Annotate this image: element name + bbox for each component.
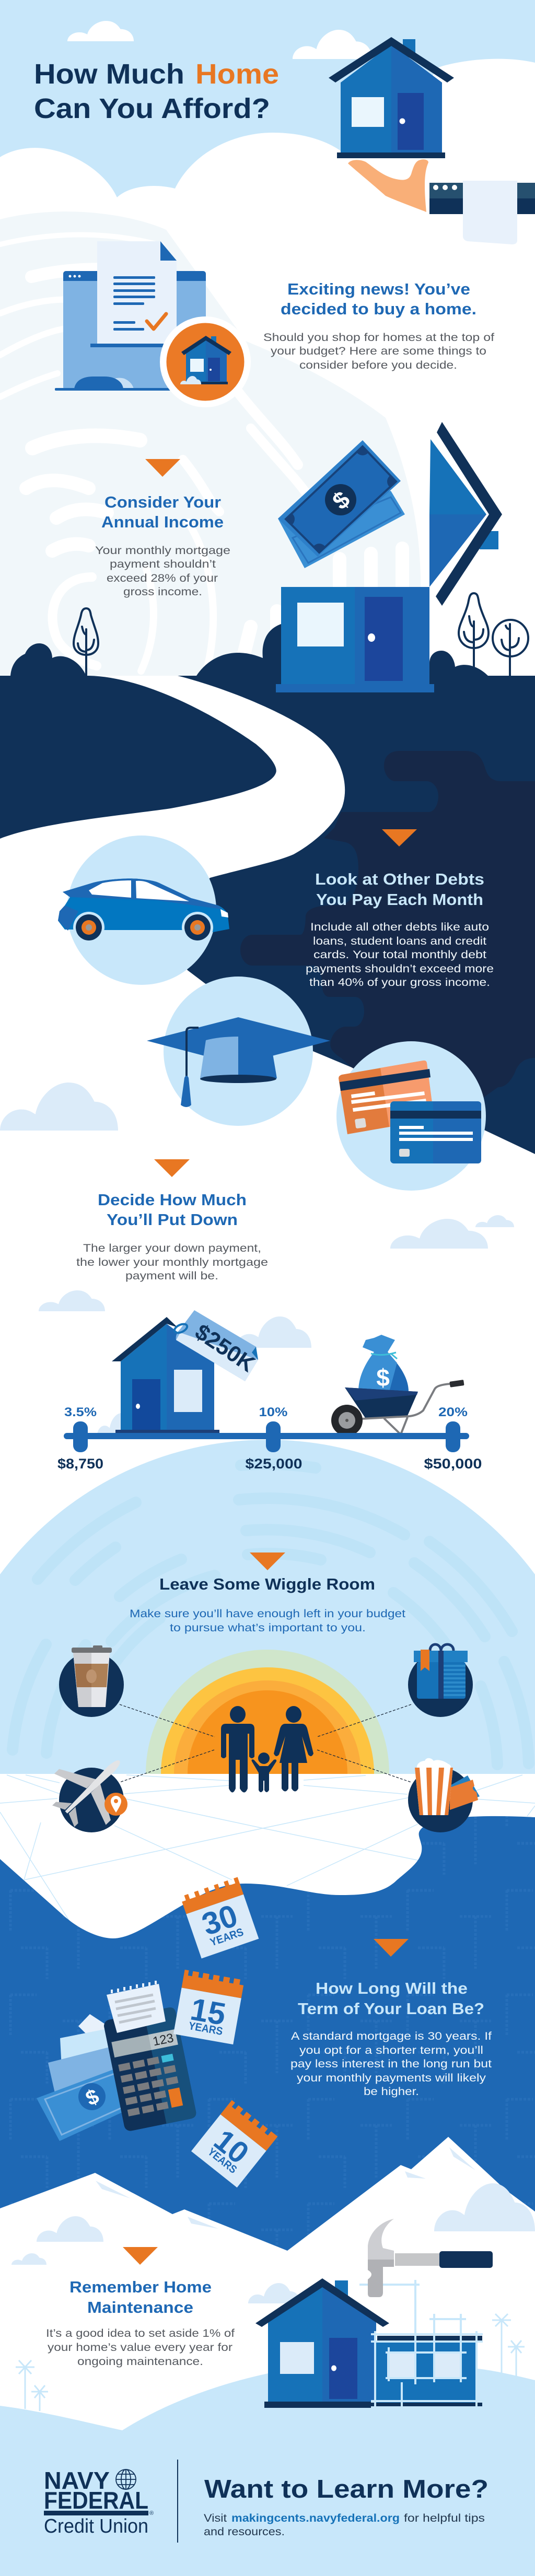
heading: down payment: You’ll Put Down	[107, 1210, 238, 1229]
icon: calendar 15 years: 15	[188, 1992, 228, 2032]
woman	[274, 1706, 313, 1791]
location pin	[104, 1793, 127, 1816]
chimney	[403, 39, 415, 57]
connector lines	[120, 1704, 411, 1782]
icon: globe	[116, 2469, 136, 2489]
cloud: right	[390, 1219, 488, 1249]
text: footer body	[204, 2512, 485, 2538]
cloud: left mountain	[37, 2216, 103, 2242]
text: intro body	[263, 332, 494, 371]
hand	[348, 159, 428, 212]
marker: 20%: 20%	[438, 1405, 468, 1419]
title: Can You Afford?	[34, 93, 270, 124]
front bill	[278, 440, 402, 558]
cloud: behind house	[248, 2283, 300, 2303]
document	[97, 241, 177, 344]
icon: hammer	[368, 2219, 493, 2297]
extension	[371, 2336, 482, 2406]
blue card	[390, 1101, 481, 1163]
icon: calendar 10 years: YEARS	[205, 2146, 239, 2176]
cloud: above house	[39, 1290, 105, 1311]
text: wiggle room body: to pursue what’s important to you.	[170, 1622, 366, 1634]
text: footer body: and resources.	[204, 2526, 285, 2538]
car windows	[89, 880, 228, 918]
heading: other debts: Look at Other Debts	[315, 870, 484, 888]
text: maintenance body: your home’s value every year for	[48, 2342, 232, 2354]
text: intro body: consider before you decide.	[299, 359, 457, 371]
background: navy region right	[157, 676, 535, 1154]
icon: note and calculator and money	[37, 1981, 197, 2141]
tickets	[449, 1775, 480, 1810]
marker: 10%: $25,000	[246, 1456, 302, 1472]
icon: house with price tag	[112, 1310, 259, 1435]
icon: right trees	[459, 593, 528, 676]
text: loan term body: A standard mortgage is 30 years. If	[291, 2030, 492, 2042]
text: other debts body: payments shouldn’t exceed more	[306, 963, 494, 975]
background: bottom hill	[0, 2369, 535, 2576]
icon: wheelbarrow with money bag	[331, 1335, 464, 1436]
heading: loan term: How Long Will the	[316, 1979, 468, 1997]
icon: hand holding house	[329, 37, 535, 244]
icon: plane	[38, 1735, 145, 1842]
background: ground grid lines	[0, 1775, 535, 1927]
heading: want to learn more: Want to Learn More?	[204, 2475, 489, 2503]
text: annual income body: gross income.	[123, 586, 202, 598]
price tag: $250K	[190, 1320, 259, 1377]
icon: coffee	[59, 1645, 124, 1717]
base	[337, 152, 445, 158]
heading: loan term	[298, 1979, 484, 2018]
background: navy hill left	[0, 676, 276, 839]
cloud: left	[0, 1083, 118, 1131]
icon: calendar 30 years: 30	[197, 1898, 242, 1942]
background: white ground	[0, 1774, 535, 1962]
text: loan term body: pay less interest in the long run but	[290, 2058, 492, 2070]
text: loan term body: you opt for a shorter term, you’ll	[299, 2044, 483, 2056]
cloud: right mountain	[434, 2183, 535, 2231]
scaffold	[359, 2280, 483, 2413]
marker: 10%	[246, 1405, 302, 1472]
heading: other debts: You Pay Each Month	[316, 890, 483, 909]
icon: calendar 10 years	[191, 2100, 277, 2187]
window	[352, 97, 384, 127]
background: fingerprint pattern	[0, 211, 421, 676]
icon: graduation cap	[147, 977, 330, 1126]
money bag: $	[376, 1364, 390, 1391]
cloud: behind house low	[97, 1413, 139, 1436]
logo: Navy Federal Credit Union: FEDERAL	[44, 2487, 148, 2514]
title: Home	[195, 58, 279, 90]
house	[112, 1317, 219, 1435]
text: wiggle room body	[130, 1608, 405, 1634]
background: dark blobs	[240, 751, 535, 1107]
house walls	[341, 44, 442, 152]
marker: 3.5%: 3.5%	[64, 1405, 97, 1419]
arrow: wiggle room	[250, 1552, 285, 1570]
man	[221, 1706, 254, 1792]
icon: family	[221, 1706, 313, 1792]
mouse	[74, 377, 134, 390]
logo: Navy Federal Credit Union: ®	[149, 2510, 154, 2516]
roof	[255, 2278, 389, 2327]
icon: credit cards	[336, 1041, 486, 1191]
icon: money bills	[278, 440, 405, 568]
text: maintenance body: It’s a good idea to set aside 1% of	[46, 2327, 235, 2339]
text: other debts body: than 40% of your gross income.	[309, 977, 490, 989]
arrow: maintenance	[123, 2247, 158, 2265]
marker: 20%	[424, 1405, 482, 1472]
logo: Navy Federal Credit Union: NAVY	[44, 2467, 110, 2494]
window	[280, 2342, 314, 2374]
heading: annual income: Annual Income	[101, 513, 224, 531]
arrow: down payment	[154, 1159, 190, 1177]
browser window	[63, 271, 206, 390]
text: annual income body: payment shouldn’t	[110, 558, 216, 570]
heading: exciting news	[281, 280, 476, 318]
money stack	[37, 2014, 128, 2141]
orange badge	[160, 316, 251, 407]
text: down payment body	[76, 1242, 268, 1282]
icon: popcorn and tickets	[408, 1758, 480, 1832]
text: other debts body: cards. Your total monthly debt	[313, 949, 486, 961]
text: loan term body: your monthly payments will likely	[297, 2072, 486, 2084]
icon: calendar 15 years	[173, 1970, 245, 2044]
price tag	[173, 1310, 259, 1381]
marker: 3.5%: $8,750	[57, 1456, 103, 1472]
marker: 3.5%	[57, 1405, 103, 1472]
heading: maintenance: Maintenance	[87, 2298, 193, 2316]
text: annual income body: Your monthly mortgage	[95, 545, 230, 557]
heading: exciting news: Exciting news! You’ve	[287, 280, 470, 298]
handle and legs	[333, 1384, 450, 1434]
heading: down payment: Decide How Much	[98, 1191, 247, 1209]
chimney	[335, 2280, 348, 2299]
door	[398, 93, 424, 150]
icon: left tree	[74, 608, 98, 676]
icon: browser and document	[55, 241, 251, 407]
text: down payment body: The larger your down payment,	[83, 1242, 261, 1254]
text: loan term body	[290, 2030, 492, 2098]
calculator: 123	[152, 2031, 175, 2049]
text: other debts body: Include all other debts like auto	[310, 921, 489, 933]
orange card	[339, 1061, 434, 1134]
heading: other debts	[315, 870, 484, 909]
text: footer body: Visit	[204, 2512, 227, 2524]
cloud: behind tag	[236, 1316, 311, 1348]
car roof	[58, 878, 222, 931]
heading: annual income	[101, 493, 224, 531]
text: other debts body: loans, student loans and credit	[313, 935, 486, 947]
text: annual income body: exceed 28% of your	[107, 572, 218, 584]
text: maintenance body	[46, 2327, 235, 2368]
logo: Navy Federal Credit Union: Credit Union	[44, 2515, 148, 2537]
tray	[345, 1387, 418, 1418]
icon: calendar 15 years: YEARS	[188, 2020, 224, 2038]
front bill: $	[327, 486, 355, 515]
money stack: $	[82, 2085, 102, 2110]
text: maintenance body: ongoing maintenance.	[77, 2356, 203, 2368]
icon: house under repair	[255, 2278, 483, 2413]
napkin	[463, 181, 517, 244]
roof	[329, 37, 454, 83]
text: down payment body: payment will be.	[125, 1270, 218, 1282]
heading: loan term: Term of Your Loan Be?	[298, 1999, 484, 2018]
cloud: behind house	[293, 30, 372, 59]
text: down payment body: the lower your monthly mortgage	[76, 1256, 268, 1268]
mountain snow accents	[96, 2147, 475, 2229]
text: annual income body	[95, 545, 230, 598]
base	[264, 2402, 371, 2408]
back bill	[278, 491, 405, 568]
text: wiggle room body: Make sure you’ll have enough left in your budget	[130, 1608, 405, 1620]
text: intro body: Should you shop for homes at the top of	[263, 332, 494, 344]
heading: exciting news: decided to buy a home.	[281, 300, 476, 318]
sleeve	[429, 183, 535, 214]
cloud: small top left	[67, 21, 134, 41]
icon: house body	[276, 587, 434, 692]
heading: maintenance	[69, 2278, 212, 2316]
icon: palm trees left	[16, 2360, 48, 2411]
arrow: other debts	[382, 829, 417, 846]
heading: wiggle room: Leave Some Wiggle Room	[159, 1575, 375, 1593]
arrow: annual income	[145, 459, 180, 477]
marker: 20%: $50,000	[424, 1456, 482, 1472]
calculator	[103, 2006, 197, 2132]
divider	[177, 2460, 178, 2543]
logo: Navy Federal Credit Union	[44, 2467, 154, 2537]
text: footer body: for helpful tips	[404, 2512, 485, 2524]
wheel	[331, 1405, 363, 1436]
arrow: loan term	[374, 1939, 409, 1957]
background: white mountains	[0, 2137, 535, 2454]
text: other debts body	[306, 921, 494, 989]
icon: calendar 10 years: 10	[207, 2123, 255, 2171]
heading: down payment	[98, 1191, 247, 1229]
icon: gift	[408, 1644, 473, 1717]
text: footer body: makingcents.navyfederal.org	[231, 2512, 400, 2524]
icon: calendar 30 years: YEARS	[208, 1926, 245, 1949]
cloud: right small	[475, 1215, 514, 1227]
icon: calendar 30 years	[180, 1877, 259, 1958]
icon: opened roof	[429, 422, 502, 606]
cloud: small left	[11, 2253, 46, 2265]
background: large circle with rings	[0, 1440, 535, 2105]
icon: car	[58, 836, 229, 985]
bushes	[0, 624, 488, 681]
background: large white cloud	[0, 59, 535, 261]
child	[252, 1752, 276, 1792]
icon: sun	[146, 1650, 389, 1774]
background: sky	[0, 0, 535, 219]
icon: palm trees right	[492, 2314, 525, 2376]
title	[34, 58, 279, 124]
text: loan term body: be higher.	[364, 2086, 419, 2098]
door	[329, 2338, 357, 2399]
popcorn	[415, 1758, 453, 1815]
heading: maintenance: Remember Home	[69, 2278, 212, 2296]
money bag	[358, 1335, 409, 1392]
title: How Much	[34, 58, 184, 90]
background: blue wave with dots	[0, 1816, 535, 2298]
text: intro body: your budget? Here are some things to	[271, 345, 486, 357]
chart: down payment timeline	[57, 1405, 482, 1472]
wheels	[73, 912, 213, 943]
note paper	[107, 1981, 166, 2033]
walls	[268, 2286, 376, 2402]
marker: 10%: 10%	[259, 1405, 287, 1419]
car body	[58, 878, 229, 932]
heading: annual income: Consider Your	[104, 493, 221, 511]
